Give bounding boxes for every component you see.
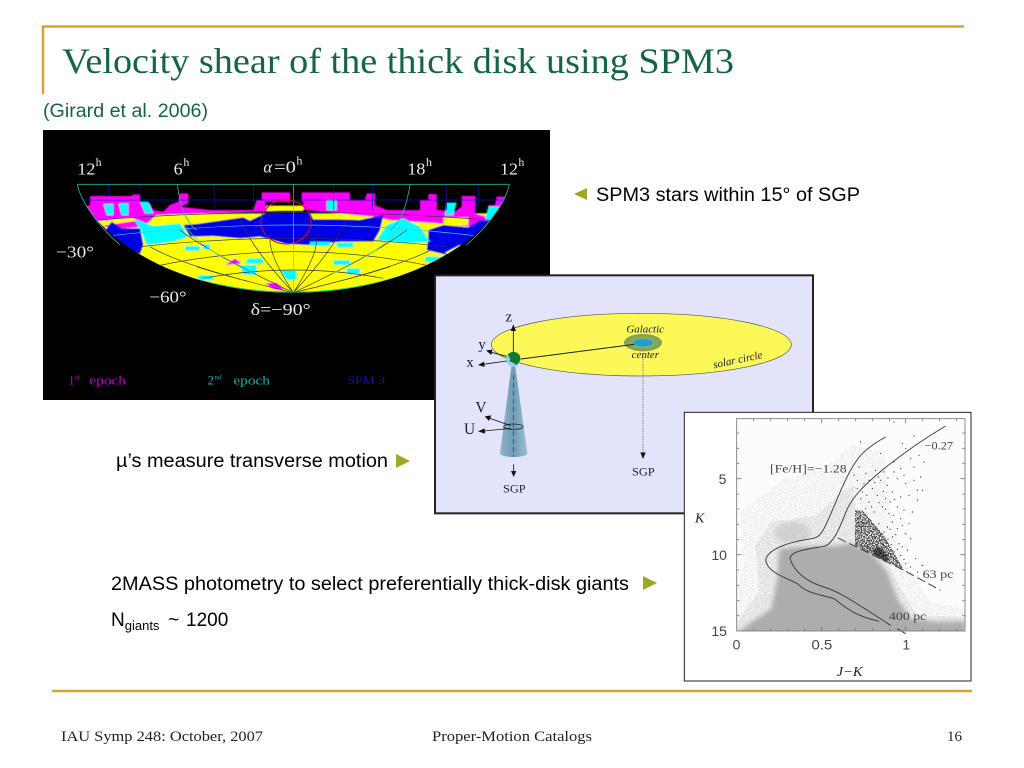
diagram labels: Galactic xyxy=(626,324,664,335)
plot annotations: 63 pc xyxy=(923,567,953,581)
map labels: h xyxy=(183,155,189,169)
region: magenta first-epoch xyxy=(83,192,505,228)
map labels: α xyxy=(263,158,273,177)
map legend: first epoch: 1 xyxy=(68,374,75,388)
isochrones xyxy=(766,426,946,634)
map labels xyxy=(56,154,524,319)
map: coverage bowl xyxy=(73,184,513,297)
map labels: h xyxy=(296,154,302,168)
footer: left: IAU Symp 248: October, 2007 xyxy=(61,729,264,745)
map legend: second epoch: nd xyxy=(214,372,222,381)
axis titles: J−K xyxy=(837,665,863,680)
axes arrows xyxy=(478,324,516,477)
footer: center: Proper-Motion Catalogs xyxy=(432,729,592,745)
citation: (Girard et al. 2006) xyxy=(43,101,208,122)
map: coordinate grid xyxy=(90,212,497,293)
map labels: −30° xyxy=(56,242,94,261)
axis titles: K xyxy=(694,512,705,527)
map labels: 12 xyxy=(77,159,95,178)
axis labels xyxy=(711,471,910,652)
plot annotations xyxy=(770,438,953,623)
footer: page number: 16 xyxy=(947,729,962,745)
label: SPM3 stars: SPM3 stars within 15° of SGP xyxy=(596,185,860,206)
map: cyan and blue grid xyxy=(80,184,507,293)
axis labels: 0 xyxy=(733,636,741,652)
diagram labels: z xyxy=(506,310,513,326)
region: yellow strips xyxy=(93,206,468,227)
label: number of giants: 1200 xyxy=(186,610,228,631)
sun to center line xyxy=(513,344,634,360)
map labels: 6 xyxy=(174,159,183,178)
map labels: h xyxy=(518,155,524,169)
map: south rim xyxy=(182,273,408,293)
arrow: left xyxy=(574,188,587,200)
scatter: darkest clump xyxy=(872,547,889,562)
diagram labels: SGP xyxy=(632,465,655,479)
map labels: h xyxy=(426,155,432,169)
panel: galactic geometry diagram xyxy=(435,275,813,513)
region: blue right xyxy=(427,220,493,256)
arrow: right xyxy=(643,576,657,590)
diagram labels: y xyxy=(478,337,486,353)
title rule: top and left gold lines xyxy=(43,26,964,94)
region: cyan patches xyxy=(103,200,500,280)
map: red SGP circle xyxy=(261,200,311,244)
diagram labels xyxy=(464,310,764,495)
label: number of giants: N xyxy=(111,610,125,631)
earth xyxy=(506,352,521,367)
cone xyxy=(500,367,527,457)
plot frame and ticks xyxy=(737,419,965,631)
map labels: δ=−90° xyxy=(251,300,311,319)
diagram labels: center xyxy=(632,350,660,361)
axis labels: 0.5 xyxy=(811,636,833,652)
map labels: −60° xyxy=(149,288,187,307)
map labels: 18 xyxy=(407,159,425,178)
map labels: =0 xyxy=(274,158,296,177)
scatter: dense selected giants xyxy=(855,510,904,570)
region: black notches xyxy=(265,193,487,212)
diagram labels: U xyxy=(464,421,475,438)
axis labels: 15 xyxy=(711,623,727,639)
label: number of giants: ~ xyxy=(168,610,179,631)
label: transverse motion: µ’s measure transverse motion xyxy=(116,451,388,472)
plot annotations: −0.27 xyxy=(925,438,953,452)
axis labels: 1 xyxy=(902,636,910,652)
plot background xyxy=(737,419,965,631)
axis titles xyxy=(694,512,863,680)
panel: sky coverage map xyxy=(43,130,550,400)
callout: SPM3 stars xyxy=(574,185,860,206)
map legend: second epoch xyxy=(208,372,271,388)
region: blue central band xyxy=(183,213,383,245)
callout: proper motions xyxy=(116,451,410,472)
map legend: first epoch: epoch xyxy=(89,374,127,388)
label: 2MASS: 2MASS photometry to select preferentially thick-disk giants xyxy=(111,574,629,595)
axis labels: 5 xyxy=(719,471,727,487)
diagram labels: V xyxy=(475,399,486,416)
arrow: right xyxy=(396,454,410,468)
map labels: 12 xyxy=(500,159,518,178)
scatter: sparse selected giants xyxy=(854,422,924,572)
plot annotations: [Fe/H]=−1.28 xyxy=(770,462,847,476)
map: outline xyxy=(77,184,509,245)
solar circle disk xyxy=(491,313,791,376)
map legend: first epoch xyxy=(68,372,127,388)
map legend: second epoch: epoch xyxy=(233,374,271,388)
line to SGP from center xyxy=(641,353,644,452)
panel: colour-magnitude diagram xyxy=(684,412,971,681)
diagram labels: SGP xyxy=(503,481,526,495)
map legend: SPM3: SPM 3 xyxy=(347,375,385,387)
region: magenta spots xyxy=(225,258,285,290)
title: Velocity shear of the thick disk using SPM3 xyxy=(62,41,734,81)
region: blue left xyxy=(103,222,143,254)
footer rule xyxy=(52,690,972,692)
map legend: first epoch: st xyxy=(75,372,80,381)
region: yellow south rim accents xyxy=(445,245,462,256)
galactic center bulge xyxy=(624,334,662,351)
map labels: h xyxy=(96,155,102,169)
diagram labels: solar circle xyxy=(712,349,764,371)
label: number of giants: giants xyxy=(125,618,160,633)
map legend: second epoch: 2 xyxy=(208,374,214,388)
diagram labels: x xyxy=(466,355,474,371)
scatter: field stars xyxy=(734,422,965,635)
plot annotations: 400 pc xyxy=(889,609,926,623)
arrow: center SGP xyxy=(640,452,646,459)
callout: photometry selection xyxy=(111,574,657,595)
axis labels: 10 xyxy=(711,547,727,563)
